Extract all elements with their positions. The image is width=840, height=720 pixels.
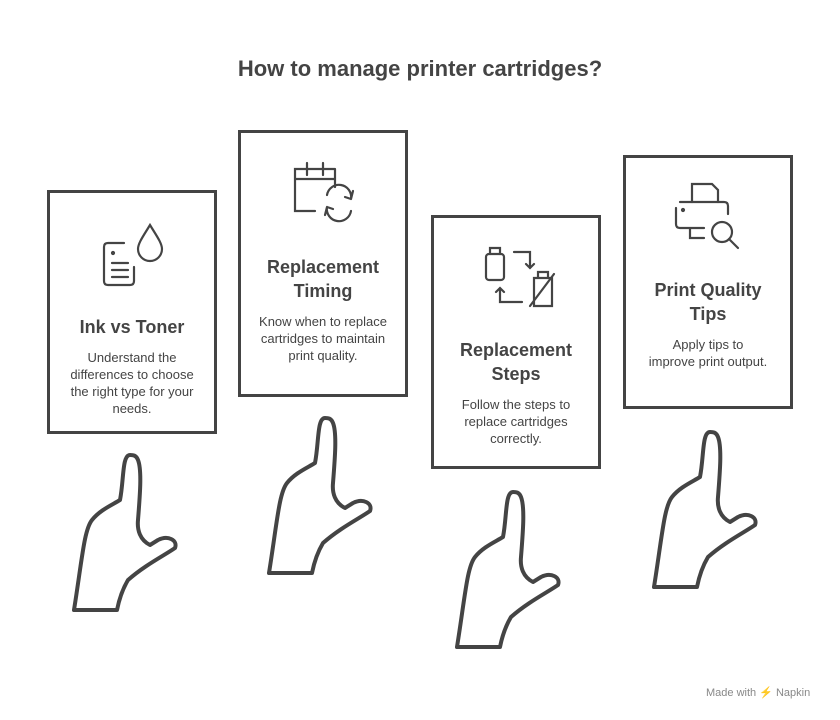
heading: Replacement Steps bbox=[460, 340, 572, 384]
title: How to manage printer cartridges? bbox=[238, 56, 602, 81]
text: Understand the differences to choose the right type for your needs. bbox=[70, 350, 194, 416]
icon: calendar refresh bbox=[294, 162, 354, 222]
text: Follow the steps to replace cartridges correctly. bbox=[462, 397, 570, 446]
icon: printer with magnifier bbox=[674, 182, 740, 250]
panel: replacement steps bbox=[431, 215, 601, 469]
text: Apply tips to improve print output. bbox=[649, 337, 767, 369]
heading: Ink vs Toner bbox=[80, 317, 184, 337]
panel: replacement timing bbox=[238, 130, 408, 397]
hand 1 bbox=[74, 455, 176, 610]
heading: Print Quality Tips bbox=[654, 280, 762, 324]
text: Know when to replace cartridges to maintain print quality. bbox=[259, 314, 387, 363]
icon: document and drop bbox=[102, 223, 164, 286]
hand 4 bbox=[654, 432, 756, 587]
icon: cartridge swap bbox=[484, 246, 556, 308]
panel: print quality tips bbox=[623, 155, 793, 409]
heading: Replacement Timing bbox=[267, 257, 379, 301]
hand 3 bbox=[457, 492, 559, 647]
hand 2 bbox=[269, 418, 371, 573]
footer credit: Made with ⚡ Napkin bbox=[706, 687, 810, 699]
panel: ink vs toner bbox=[47, 190, 217, 434]
